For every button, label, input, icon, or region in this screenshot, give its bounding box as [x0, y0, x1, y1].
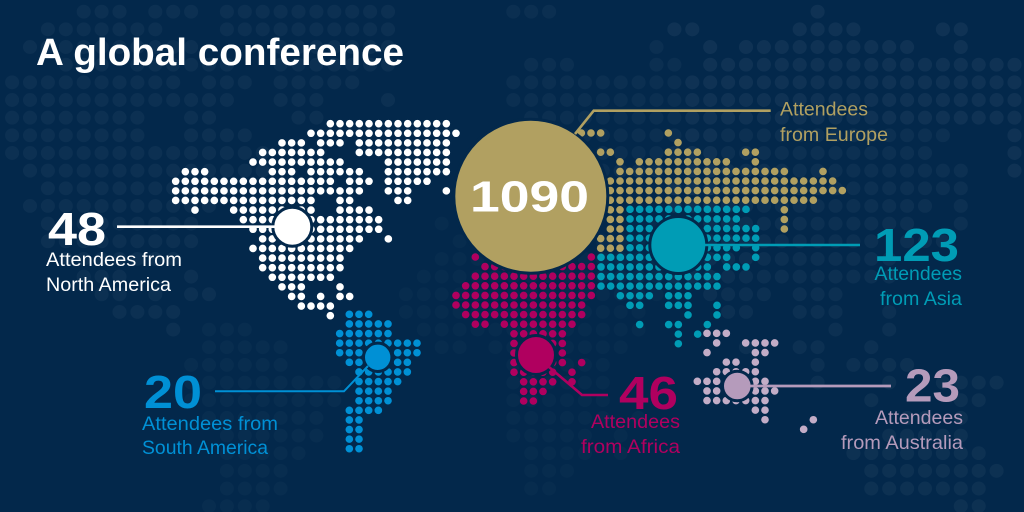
label: North America: North America: [46, 274, 171, 296]
panel: Australia: [697, 333, 963, 454]
leader line: Asia: [704, 244, 860, 246]
label: Africa: from Africa: [581, 436, 680, 458]
panel: South America: [142, 314, 417, 459]
marker: South America: [364, 343, 392, 371]
leader line: Europe: [575, 111, 771, 134]
label: South America: South America: [142, 437, 268, 459]
marker: Africa: [516, 336, 556, 374]
value: 23: 23: [905, 360, 960, 412]
marker: Asia: [650, 216, 707, 274]
panel: Asia: [601, 209, 962, 344]
value: 123: 123: [874, 219, 959, 271]
label: Asia: from Asia: [880, 288, 962, 310]
label: North America: Attendees from: [46, 249, 182, 271]
dot map: North America: [176, 124, 456, 316]
marker: Australia: [722, 371, 752, 401]
dot map: Europe: [581, 133, 842, 248]
label: Australia: from Australia: [841, 432, 963, 454]
dot map: South America: [340, 314, 417, 449]
value: 20: 20: [144, 366, 202, 418]
value: 46: 46: [619, 367, 678, 419]
value: 1090: 1090: [470, 173, 589, 222]
label: Europe: Attendees: [780, 99, 868, 121]
panel: Europe: [454, 99, 888, 273]
value: 48: 48: [48, 203, 106, 255]
leader line: Australia: [749, 385, 891, 387]
label: Africa: Attendees: [591, 411, 680, 433]
leader line: North America: [117, 225, 276, 228]
dot map: Africa: [456, 257, 591, 401]
marker: Europe, 1090 circle: [454, 119, 608, 273]
dot map: Australia: [697, 333, 813, 429]
label: South America: Attendees from: [142, 413, 278, 435]
dot map: Asia: [601, 209, 756, 344]
label: Australia: Attendees: [875, 407, 963, 429]
label: Europe: from Europe: [780, 124, 888, 146]
leader line: South America: [215, 366, 368, 391]
label: Asia: Attendees: [874, 263, 962, 285]
leader line: Africa: [549, 367, 608, 395]
title: A global conference: [36, 32, 404, 74]
panel: North America: [46, 124, 456, 316]
marker: North America: [273, 207, 312, 246]
panel: Africa: [456, 257, 680, 458]
